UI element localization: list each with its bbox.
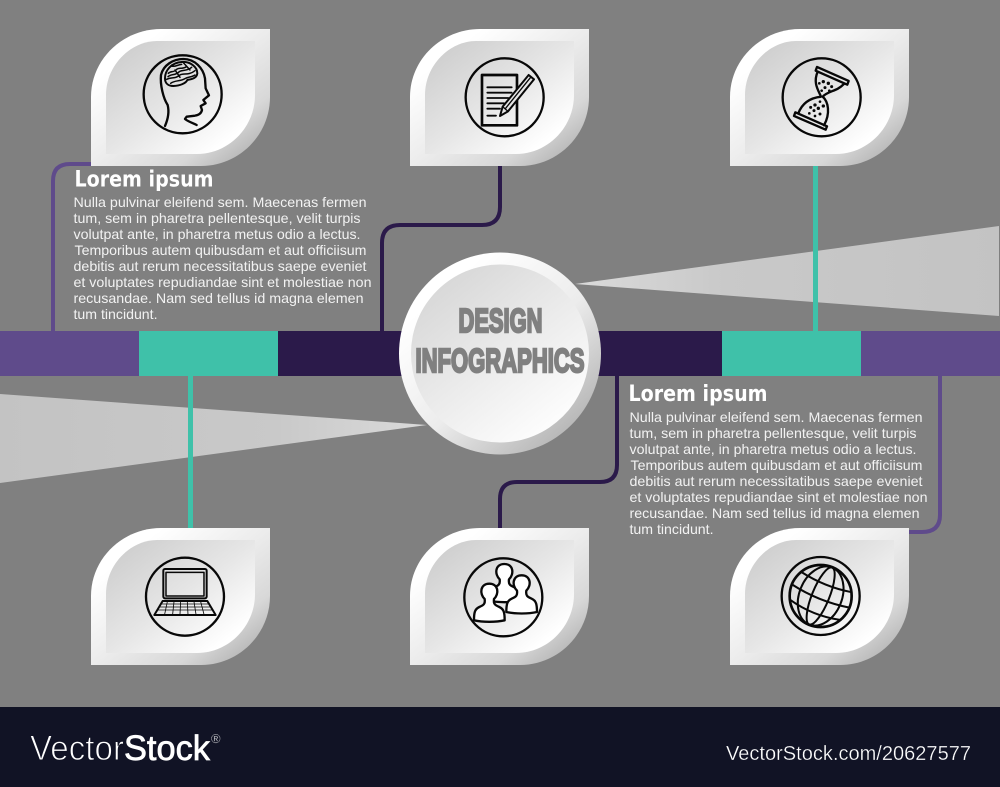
body text: debitis aut rerum necessitatibus saepe eveniet <box>74 259 367 274</box>
footer logo: Vector <box>30 729 124 768</box>
connector: top left purple <box>53 164 92 331</box>
body text <box>630 410 928 537</box>
footer logo: Stock <box>124 729 210 768</box>
body text: tum, sem in pharetra pellentesque, velit turpis <box>630 426 917 441</box>
body text: volutpat ante, in pharetra metus odio a lectus. <box>630 442 916 457</box>
footer id: VectorStock.com/20627577 <box>726 743 971 765</box>
connector: bottom right purple <box>908 376 940 532</box>
title <box>416 303 584 380</box>
body text: recusandae. Nam sed tellus id magna elemen <box>74 291 364 306</box>
text block: top left <box>74 168 372 322</box>
title: DESIGN <box>458 303 542 340</box>
card: globe <box>730 528 909 665</box>
body text: recusandae. Nam sed tellus id magna elemen <box>630 506 920 521</box>
light beam left <box>0 394 427 483</box>
icon: document and pencil <box>466 58 544 136</box>
body text: Nulla pulvinar eleifend sem. Maecenas fermen <box>74 195 366 210</box>
footer bar <box>0 707 1000 787</box>
card: people <box>410 528 589 665</box>
connector: bottom middle dark <box>500 376 617 529</box>
light beam right <box>575 226 999 316</box>
central circle with title <box>399 252 601 454</box>
body text: Nulla pulvinar eleifend sem. Maecenas fermen <box>630 410 922 425</box>
card: brain head <box>91 29 270 166</box>
text block: bottom right <box>628 382 928 537</box>
card: laptop <box>91 528 270 665</box>
icon: globe <box>780 556 861 636</box>
body text: tum tincidunt. <box>630 522 714 537</box>
body text: Temporibus autem quibusdam et aut officiisum <box>74 243 366 258</box>
timeline bar <box>0 331 1000 376</box>
body text <box>74 195 372 322</box>
body text: volutpat ante, in pharetra metus odio a lectus. <box>74 227 360 242</box>
heading: Lorem ipsum <box>628 382 768 407</box>
card: document <box>410 29 589 166</box>
connector: top right teal <box>813 165 818 331</box>
icon: laptop <box>146 558 224 636</box>
body text: et voluptates repudiandae sint et molestiae non <box>630 490 928 505</box>
heading: Lorem ipsum <box>74 168 214 192</box>
title: INFOGRAPHICS <box>416 343 584 380</box>
body text: Temporibus autem quibusdam et aut officiisum <box>630 458 922 473</box>
footer logo: ® <box>211 731 221 746</box>
connector: top middle dark <box>382 165 500 331</box>
body text: debitis aut rerum necessitatibus saepe eveniet <box>630 474 923 489</box>
icon: people group <box>464 558 542 636</box>
body text: tum tincidunt. <box>74 307 158 322</box>
card: hourglass <box>730 29 909 166</box>
connector: bottom left teal <box>188 376 193 529</box>
body text: tum, sem in pharetra pellentesque, velit turpis <box>74 211 361 226</box>
body text: et voluptates repudiandae sint et molestiae non <box>74 275 372 290</box>
icon: head with brain <box>144 55 222 133</box>
icon: hourglass <box>783 58 861 136</box>
footer logo <box>30 729 221 768</box>
